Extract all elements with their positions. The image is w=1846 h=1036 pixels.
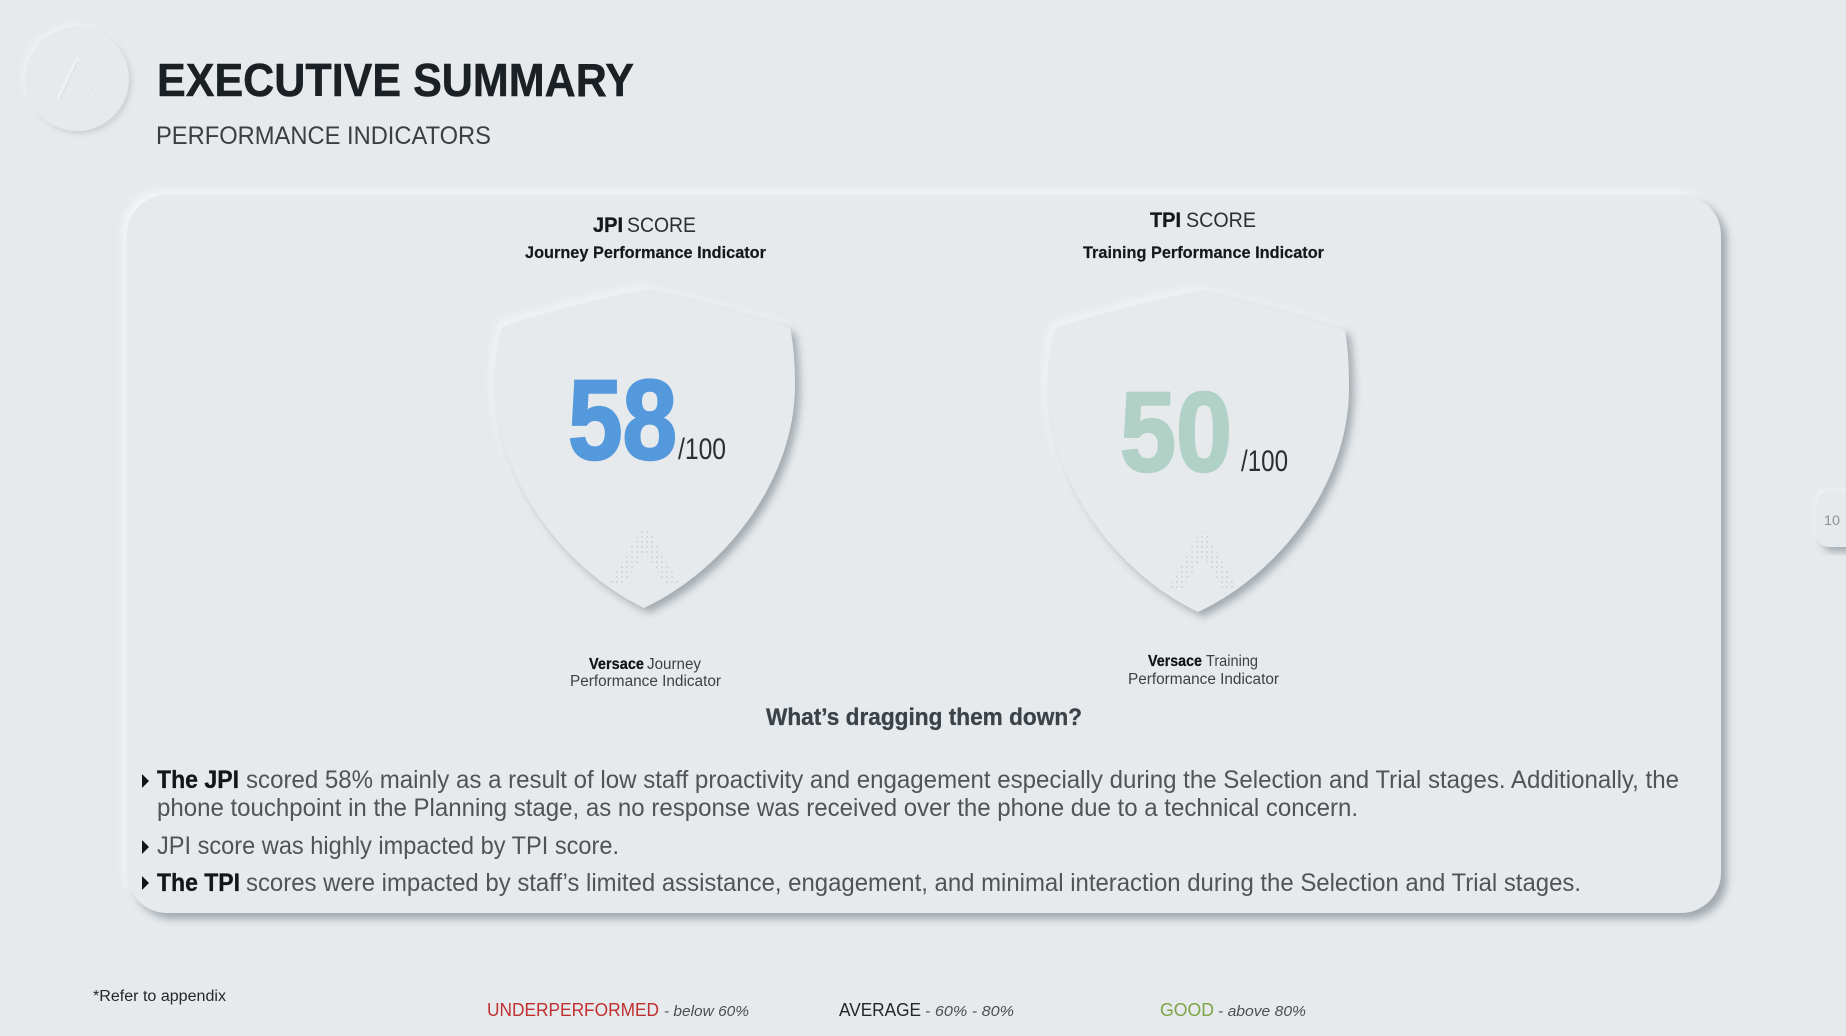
bullet 1: The JPI [157,766,239,794]
panel: performance indicators [127,195,1721,913]
score denominator: /100 [678,433,726,466]
subheading: Journey Performance Indicator: Journey Performance Indicator [525,243,766,262]
legend: good [1160,999,1306,1020]
caption: Versace Journey Performance Indicator: Versace [589,656,644,673]
legend: average: AVERAGE [839,999,921,1020]
caption: Versace Training Performance Indicator: Versace [1148,653,1202,670]
legend: underperformed: UNDERPERFORMED [487,999,659,1020]
caption: Versace Journey Performance Indicator: Journey [647,656,701,673]
bullet 1: scored 58% mainly as a result of low staff proactivity and engagement especially during the Selection and Trial stages. Additionally, the [246,766,1679,794]
score denominator: /100 [1241,445,1288,478]
heading: TPI score: SCORE [1186,209,1256,232]
legend: underperformed: - below 60% [664,1003,749,1020]
heading: JPI score: SCORE [627,214,696,237]
heading: JPI score: JPI [593,214,623,237]
score: 50: 50 [1120,369,1232,495]
icon: dotted chevron [610,528,679,583]
subheading: Training Performance Indicator: Training Performance Indicator [1083,243,1324,262]
legend: average [839,999,1014,1020]
bullet 3: scores were impacted by staff’s limited assistance, engagement, and minimal interaction during the Selection and Trial stages. [246,869,1581,897]
legend: good: - above 80% [1218,1003,1306,1020]
text block: bullet findings [142,766,1679,897]
bullet 1: phone touchpoint in the Planning stage, as no response was received over the phone due to a technical concern. [157,794,1358,822]
score: 58: 58 [568,357,677,483]
caption: Versace Journey Performance Indicator: Performance Indicator [570,673,721,690]
icon: brand logo circle [25,27,129,131]
legend: average: - 60% - 80% [925,1003,1014,1020]
subtitle: PERFORMANCE INDICATORS [156,122,491,150]
legend: good: GOOD [1160,999,1214,1020]
caption: Versace Training Performance Indicator: Performance Indicator [1128,671,1279,688]
heading: TPI score: TPI [1150,209,1181,232]
heading: JPI score [593,214,696,237]
title: EXECUTIVE SUMMARY [157,54,634,106]
shield: TPI score [1048,291,1349,612]
bullet 2: JPI score was highly impacted by TPI score. [157,832,619,860]
page number tab: 10 [1824,512,1840,528]
bullet 1 [142,766,1679,822]
caption: Versace Journey Performance Indicator [570,656,721,690]
caption: Versace Training Performance Indicator: Training [1206,653,1258,670]
caption: Versace Training Performance Indicator [1128,653,1279,688]
shield: JPI score [495,290,795,608]
heading: what's dragging them down: What’s dragging them down? [766,704,1082,731]
icon: dotted chevron [1168,532,1237,588]
page number tab [1817,492,1846,547]
footnote: *Refer to appendix [93,988,226,1005]
bullet 3: The TPI [157,869,240,897]
heading: TPI score [1150,209,1256,232]
